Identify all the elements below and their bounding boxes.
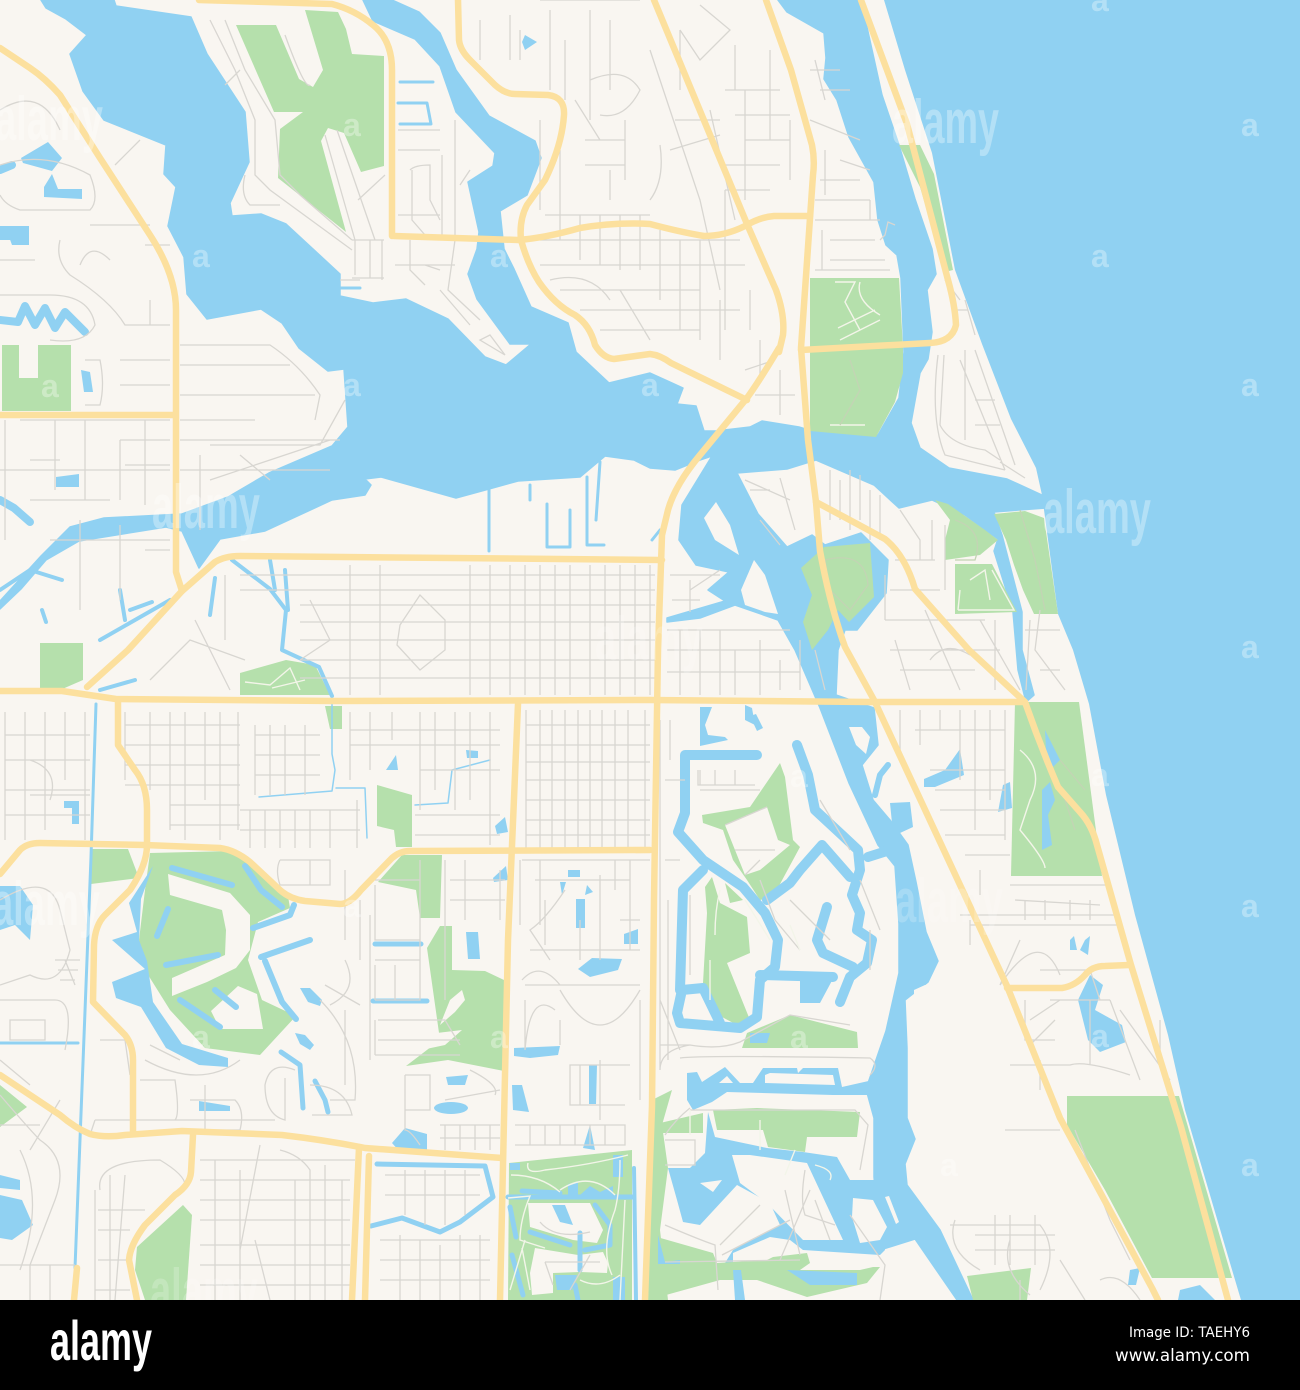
watermark words: alamy	[1043, 478, 1151, 547]
road: central north-south	[645, 348, 779, 1300]
canal: thin drains	[259, 704, 490, 838]
stream west	[0, 560, 332, 696]
footer logo: alamy	[50, 1309, 152, 1372]
watermark letters: a	[490, 1019, 508, 1055]
watermark letters: a	[1241, 1147, 1259, 1183]
park: river island	[801, 543, 874, 650]
ocean	[884, 0, 1300, 1300]
road: west loop	[93, 700, 147, 1131]
canals: west golf	[157, 866, 310, 1027]
canals: south-east estate	[677, 745, 890, 1028]
park: inlet square	[955, 564, 1017, 614]
road: south twin	[352, 1148, 369, 1300]
park: large ocean preserve	[1067, 1096, 1232, 1278]
watermark letters: a	[940, 1147, 958, 1183]
park: south center	[406, 926, 504, 1071]
watermark letters: a	[1241, 367, 1259, 403]
watermark letters: a	[343, 107, 361, 143]
grey trails in parks	[825, 360, 1085, 830]
watermark letters: a	[343, 888, 361, 924]
footer bar	[0, 1300, 1300, 1390]
watermark letters: a	[1091, 1018, 1109, 1054]
road: riverside loop	[458, 0, 747, 400]
watermark words: alamy	[152, 473, 260, 542]
watermark letters: a	[1091, 238, 1109, 274]
watermark words: alamy	[150, 1257, 258, 1326]
road: coastal north-south	[766, 0, 1158, 1300]
canals: lake fingers	[340, 82, 660, 551]
watermark letters: a	[1091, 757, 1109, 793]
canals	[0, 82, 890, 1300]
watermark letters: a	[192, 1019, 210, 1055]
watermark letters: a	[790, 758, 808, 794]
canal: side channel	[875, 765, 888, 795]
watermark letters: a	[1241, 629, 1259, 665]
park: center golf	[702, 763, 800, 900]
watermark letters: a	[1241, 888, 1259, 924]
park: barrier strip	[899, 145, 953, 272]
road: east diagonal	[816, 502, 1228, 1300]
canal: drainage line	[75, 704, 96, 1268]
canals: south neighbourhood	[281, 944, 493, 1232]
park: central waterfront	[810, 278, 903, 437]
river and lagoon	[0, 0, 1046, 1300]
road: diagonal	[654, 0, 783, 352]
park: northern peninsula	[236, 10, 384, 232]
watermark letters: a	[641, 367, 659, 403]
road: south cross street	[0, 843, 650, 904]
park: west block	[2, 345, 71, 411]
canals: south golf	[508, 1168, 636, 1300]
road: coastal link	[1007, 965, 1129, 988]
watermark letters: a	[790, 1019, 808, 1055]
website: www.alamy.com	[1115, 1346, 1250, 1366]
park: trail	[240, 660, 330, 695]
watermark letters: a	[1241, 107, 1259, 143]
watermark words: alamy	[0, 85, 103, 154]
park: center block	[377, 785, 412, 847]
park: south golf	[508, 1150, 632, 1300]
road: northern cross street	[394, 216, 810, 240]
road: western highway	[0, 48, 182, 591]
road: south stub	[74, 1268, 77, 1300]
park: inlet west	[935, 500, 998, 560]
road: southern east-west	[0, 1075, 502, 1158]
watermark words	[0, 85, 1151, 1326]
road: northern loop	[199, 0, 392, 236]
south-east canal basins	[668, 1067, 885, 1263]
watermark letters: a	[490, 238, 508, 274]
river islands	[700, 502, 950, 1243]
road: main east-west	[0, 691, 1023, 702]
park: west golf course	[139, 851, 296, 1055]
pale park trails	[245, 282, 1045, 1300]
watermark letters: a	[343, 367, 361, 403]
road: south curve	[129, 1135, 193, 1300]
watermark letters	[41, 0, 1259, 1183]
watermark letters: a	[41, 368, 59, 404]
image id: Image ID: TAEHY6	[1129, 1325, 1250, 1341]
park: lower estate	[713, 1108, 860, 1152]
road: northern east-west	[87, 556, 662, 687]
road: west spur	[0, 412, 174, 418]
park: inlet north	[994, 511, 1058, 614]
watermark letters: a	[192, 238, 210, 274]
road: causeway and barrier island	[801, 0, 956, 350]
watermark words: alamy	[892, 88, 999, 157]
watermark words: alamy	[595, 605, 703, 674]
watermark words: alamy	[895, 867, 1003, 936]
canals: west neighbourhoods	[0, 165, 85, 522]
road: midtown north-south	[500, 704, 518, 1300]
park interior land	[168, 807, 790, 1295]
park: ocean reserve	[1011, 702, 1102, 876]
